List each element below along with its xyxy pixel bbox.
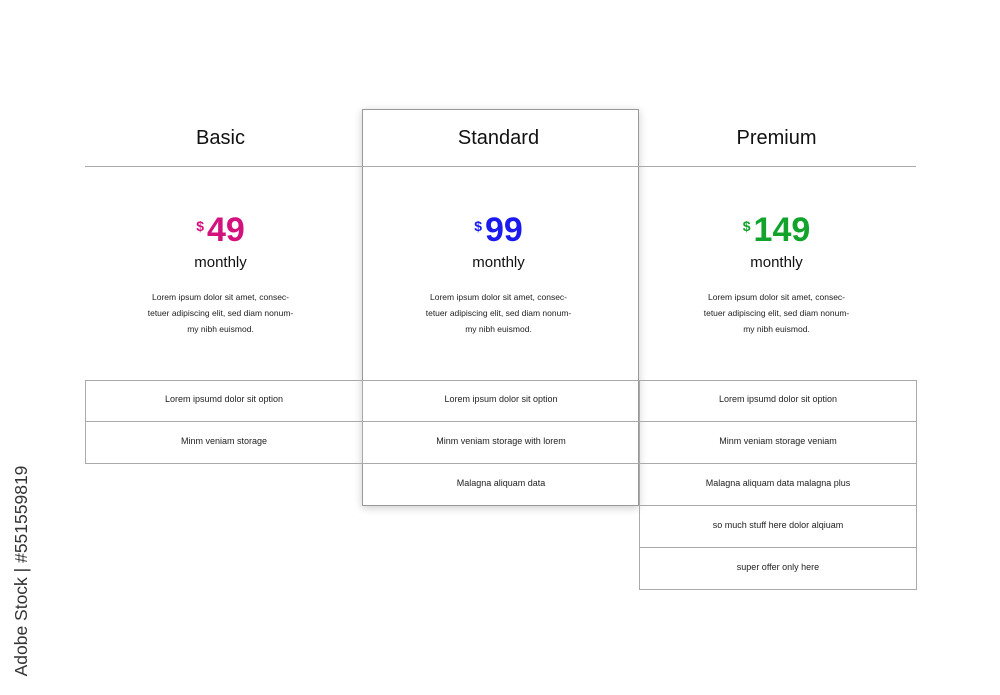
text: standard description: my nibh euismod. xyxy=(465,324,532,334)
text: basic description: tetuer adipiscing elit, sed diam nonum- xyxy=(148,308,293,318)
panel: standard xyxy=(426,127,571,334)
row: standard 2: Minm veniam storage with lorem xyxy=(436,436,566,446)
price: standard: $99 xyxy=(474,211,523,249)
text: premium monthly: monthly xyxy=(750,254,803,271)
price: premium: $149 xyxy=(743,211,810,249)
header divider xyxy=(85,166,916,167)
panel: basic xyxy=(148,127,293,334)
text: standard description: tetuer adipiscing elit, sed diam nonum- xyxy=(426,308,571,318)
text: standard description xyxy=(426,292,571,334)
row: standard 3: Malagna aliquam data xyxy=(457,478,545,488)
row: basic 2: Minm veniam storage xyxy=(181,436,267,446)
row: premium 3 xyxy=(639,464,917,506)
text: premium description: tetuer adipiscing elit, sed diam nonum- xyxy=(704,308,849,318)
price: basic: $49 xyxy=(196,211,245,249)
text: premium description: my nibh euismod. xyxy=(743,324,810,334)
row: premium 5 xyxy=(639,548,917,590)
row: standard 1: Lorem ipsum dolor sit option xyxy=(444,394,558,404)
basic feature rows xyxy=(85,380,362,464)
watermark label: Adobe Stock | #551559819 xyxy=(11,466,31,676)
text: premium description xyxy=(704,292,849,334)
premium feature rows xyxy=(639,380,917,590)
row: premium 1: Lorem ipsumd dolor sit option xyxy=(719,394,837,404)
row: premium 2: Minm veniam storage veniam xyxy=(719,436,837,446)
row: premium 1 xyxy=(639,380,917,422)
row: basic 2 xyxy=(85,422,363,464)
text: premium description: Lorem ipsum dolor sit amet, consec- xyxy=(708,292,845,302)
row: premium 4: so much stuff here dolor alqiuam xyxy=(713,520,843,530)
text: basic description: my nibh euismod. xyxy=(187,324,254,334)
row: basic 1: Lorem ipsumd dolor sit option xyxy=(165,394,283,404)
text: basic description: Lorem ipsum dolor sit amet, consec- xyxy=(152,292,289,302)
text: standard monthly: monthly xyxy=(472,254,525,271)
text: standard description: Lorem ipsum dolor sit amet, consec- xyxy=(430,292,567,302)
row: premium 3: Malagna aliquam data malagna plus xyxy=(706,478,850,488)
row: premium 5: super offer only here xyxy=(737,562,819,572)
row: standard 3 xyxy=(362,464,640,506)
standard feature rows xyxy=(363,380,639,488)
row: standard 2 xyxy=(362,422,640,464)
text: basic monthly: monthly xyxy=(194,254,247,271)
panel: premium xyxy=(704,127,849,334)
row: premium 4 xyxy=(639,506,917,548)
standard highlight box xyxy=(362,109,639,506)
title: basic: Basic xyxy=(196,127,245,149)
title: standard: Standard xyxy=(458,127,539,149)
title: premium: Premium xyxy=(736,127,816,149)
text: basic description xyxy=(148,292,293,334)
row: basic 1 xyxy=(85,380,363,422)
row: premium 2 xyxy=(639,422,917,464)
row: standard 1 xyxy=(362,380,640,422)
